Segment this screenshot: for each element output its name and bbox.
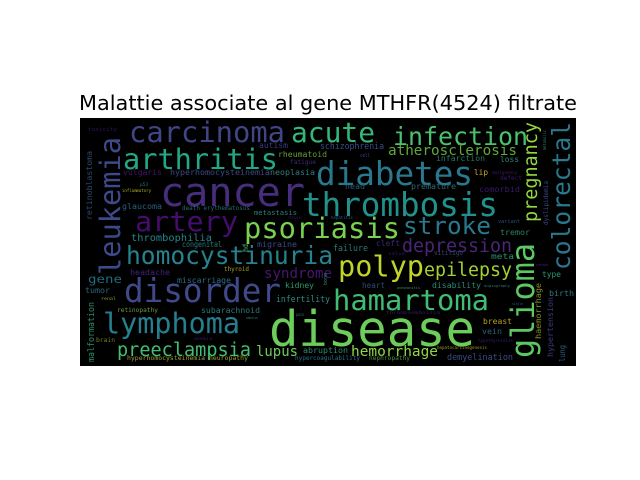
small words: hypercoagulability [295,354,360,362]
small words: inflammatory [122,188,151,194]
small words: cell [360,153,370,159]
small words: failure [333,244,368,254]
word: depression: depression [402,236,512,257]
small words: retinopathy [117,307,158,314]
word: thrombosis: thrombosis [302,186,498,224]
small words: fatigue [290,159,316,166]
word: preeclampsia: preeclampsia [117,340,251,361]
small words: lip [474,168,488,177]
word: atherosclerosis: atherosclerosis [388,143,517,159]
small words: variant [498,219,520,225]
word: epilepsy: epilepsy [424,260,512,281]
word: psoriasis: psoriasis [244,211,400,245]
small words: infarction [436,154,485,163]
small words: hd [241,244,250,252]
small words: hepatitis [331,215,354,220]
small words: thrombophilia [131,233,212,244]
small words: migraine [257,240,297,249]
word: hemorrhage: hemorrhage [351,344,438,360]
word: colorectal: colorectal [547,122,576,270]
small words: headache [130,268,170,277]
small words: p53 [140,182,149,187]
small words: defect [500,175,522,182]
small words: haemorrhage [534,283,543,339]
small words: dyslipidemia [543,181,550,225]
small words: heart [362,281,385,290]
small words: valve [388,251,406,256]
small words: thyroid [224,266,249,273]
small words: tumor [85,286,111,295]
small words: sickle [512,301,524,306]
word: carcinoma: carcinoma [129,115,285,149]
small words: hypothyroidism [478,338,513,344]
small words: cleft [376,239,400,248]
small words: breast [483,317,512,326]
small words: angiography [484,283,511,288]
large words [93,115,576,361]
word: infection: infection [393,122,528,151]
small words: metabolic [542,129,547,150]
small words: stenosis [288,215,302,220]
small words: retinoblastoma [85,151,94,220]
word: cancer: cancer [160,170,305,216]
small words: schizophrenia [320,142,384,152]
word: glioma: glioma [504,243,542,358]
small words: meta [491,252,514,261]
small words: premature [411,182,456,191]
small words: malignancy [492,170,517,176]
word: disease: disease [269,301,475,358]
word: diabetes: diabetes [316,155,473,193]
small words: loss [500,155,519,164]
small words: autism [259,141,288,150]
word: polyp: polyp [338,249,424,283]
small words: disability [432,280,481,290]
word: lymphoma: lymphoma [103,307,240,340]
small words: hyperhomocysteinemia [170,167,270,177]
panel: word cloud [80,115,576,366]
small words: vulgaris [123,168,162,177]
word: pregnancy: pregnancy [521,122,542,222]
word: stroke: stroke [403,211,491,240]
small words: vitiligo [434,249,463,257]
small words: hyperhomocysteinemia neuropathy [127,354,248,362]
small words: anemia [194,336,213,341]
small words: lung [558,345,567,362]
word: leukemia: leukemia [93,137,127,275]
small words: death erythematosus [182,205,250,212]
small words: glaucoma [122,202,162,211]
small words: abruption [303,346,348,355]
small words: bone [323,273,329,285]
small words: head [345,182,365,191]
small words: toxicity [88,127,118,133]
small words: embolus [246,316,258,320]
small words: hepatocarcinogenesis [437,345,488,350]
small words: vein [482,327,502,336]
small words: subarachnoid [201,305,260,315]
word: hamartoma: hamartoma [333,283,489,317]
word: homocystinuria: homocystinuria [126,241,333,270]
small words: nephropathy [369,354,410,362]
small words: metastasis [254,208,297,217]
small words: congenital [182,240,222,249]
small words: type [542,270,561,279]
small words: kidney [285,281,314,290]
word: arthritis: arthritis [123,142,278,176]
small words [85,127,574,362]
small words: comorbid [479,185,520,194]
small words: neoplasia [270,168,315,177]
small words: hypertension [546,297,555,357]
small words: infertility [276,295,330,305]
small words: tremor [500,228,530,237]
small words: malformation [87,302,97,362]
word: disorder: disorder [124,272,281,310]
word: acute: acute [291,116,375,149]
small words: brain [96,336,115,344]
small words: birth [549,289,574,298]
title: Malattie associate al gene MTHFR(4524) filtrate [79,91,577,115]
small words: miscarriage [177,275,231,285]
small words: gene [88,272,122,286]
small words: thromboembolism [386,310,440,316]
small words: demyelination [447,352,513,362]
word: syndrome: syndrome [264,266,332,282]
word: lupus: lupus [256,344,298,360]
word: artery: artery [135,205,238,238]
small words: head [536,262,548,267]
small words: renal [101,296,117,301]
small words: pneumonitis [397,285,420,290]
small words: rheumatoid [278,150,327,159]
small words: pain [296,312,304,317]
